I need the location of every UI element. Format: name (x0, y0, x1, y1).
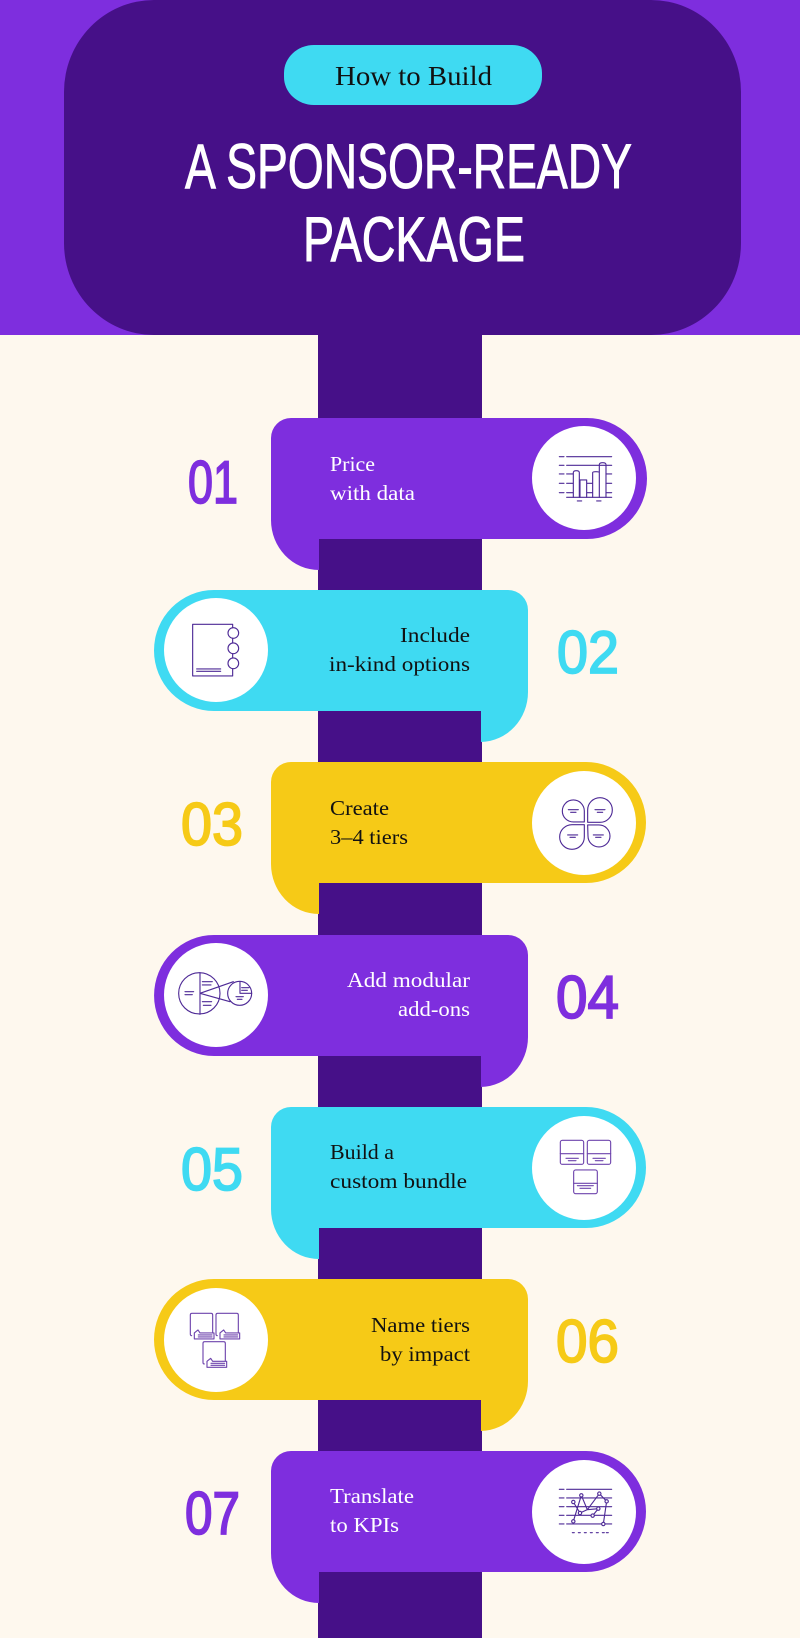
step 03 text: Create (330, 796, 389, 820)
step 07 (185, 1451, 646, 1603)
step 07 text: Translate (330, 1484, 414, 1508)
step 05 icon circle (532, 1116, 636, 1220)
step 06 card (154, 1279, 528, 1431)
step 02 icon circle (164, 598, 268, 702)
step 06 icon circle (164, 1288, 268, 1392)
subtitle pill: How to Build (335, 61, 493, 91)
step 06 (154, 1279, 619, 1431)
step 01 (188, 418, 647, 570)
step 03 text: 3–4 tiers (330, 825, 408, 849)
step 05 (181, 1107, 646, 1259)
step 05 text: custom bundle (330, 1169, 467, 1193)
step 04 text: Add modular (347, 968, 470, 992)
icon: bar chart (559, 457, 612, 501)
step 07 icon circle (532, 1460, 636, 1564)
step 05 text (330, 1140, 467, 1193)
header panel (64, 0, 741, 335)
icon: notebook (193, 624, 239, 676)
step 04 text (347, 968, 470, 1021)
step 03 icon circle (532, 771, 636, 875)
step 03 number: 03 (181, 791, 243, 858)
vertical spine (318, 330, 482, 1638)
step 04 number: 04 (556, 964, 619, 1031)
step 05 text: Build a (330, 1140, 394, 1164)
step 06 text: Name tiers (371, 1313, 470, 1337)
title (185, 132, 632, 275)
step 04 icon circle (164, 943, 268, 1047)
title: A SPONSOR-READY (185, 132, 632, 202)
step 07 number: 07 (185, 1480, 240, 1547)
icon: three panels (560, 1140, 611, 1194)
step 03 (181, 762, 646, 914)
icon: pie zoom (179, 973, 252, 1014)
step 01 text: Price (330, 452, 375, 476)
step 05 number: 05 (181, 1136, 243, 1203)
step 01 text: with data (330, 481, 415, 505)
step 06 text: by impact (380, 1342, 470, 1366)
step 02 text (329, 623, 470, 676)
step 03 card (271, 762, 646, 914)
step 02 text: Include (400, 623, 470, 647)
step 04 card (154, 935, 528, 1087)
step 01 icon circle (532, 426, 636, 530)
step 07 text: to KPIs (330, 1513, 399, 1537)
step 07 card (271, 1451, 646, 1603)
step 02 card (154, 590, 528, 742)
step 05 card (271, 1107, 646, 1259)
step 04 (154, 935, 619, 1087)
step 07 text (330, 1484, 414, 1537)
step 03 text (330, 796, 408, 849)
step 02 text: in-kind options (329, 652, 470, 676)
icon: four petals (560, 798, 612, 849)
icon: three tagged cards (190, 1313, 240, 1367)
header band (0, 0, 800, 335)
title: PACKAGE (303, 205, 525, 275)
icon: line chart (559, 1489, 612, 1533)
step 01 card (271, 418, 647, 570)
step 01 text (330, 452, 415, 505)
step 02 (154, 590, 619, 742)
step 06 text (371, 1313, 470, 1366)
step 04 text: add-ons (398, 997, 470, 1021)
step 02 number: 02 (557, 619, 619, 686)
subtitle pill (284, 45, 542, 105)
step 01 number: 01 (188, 449, 238, 516)
step 06 number: 06 (556, 1308, 619, 1375)
